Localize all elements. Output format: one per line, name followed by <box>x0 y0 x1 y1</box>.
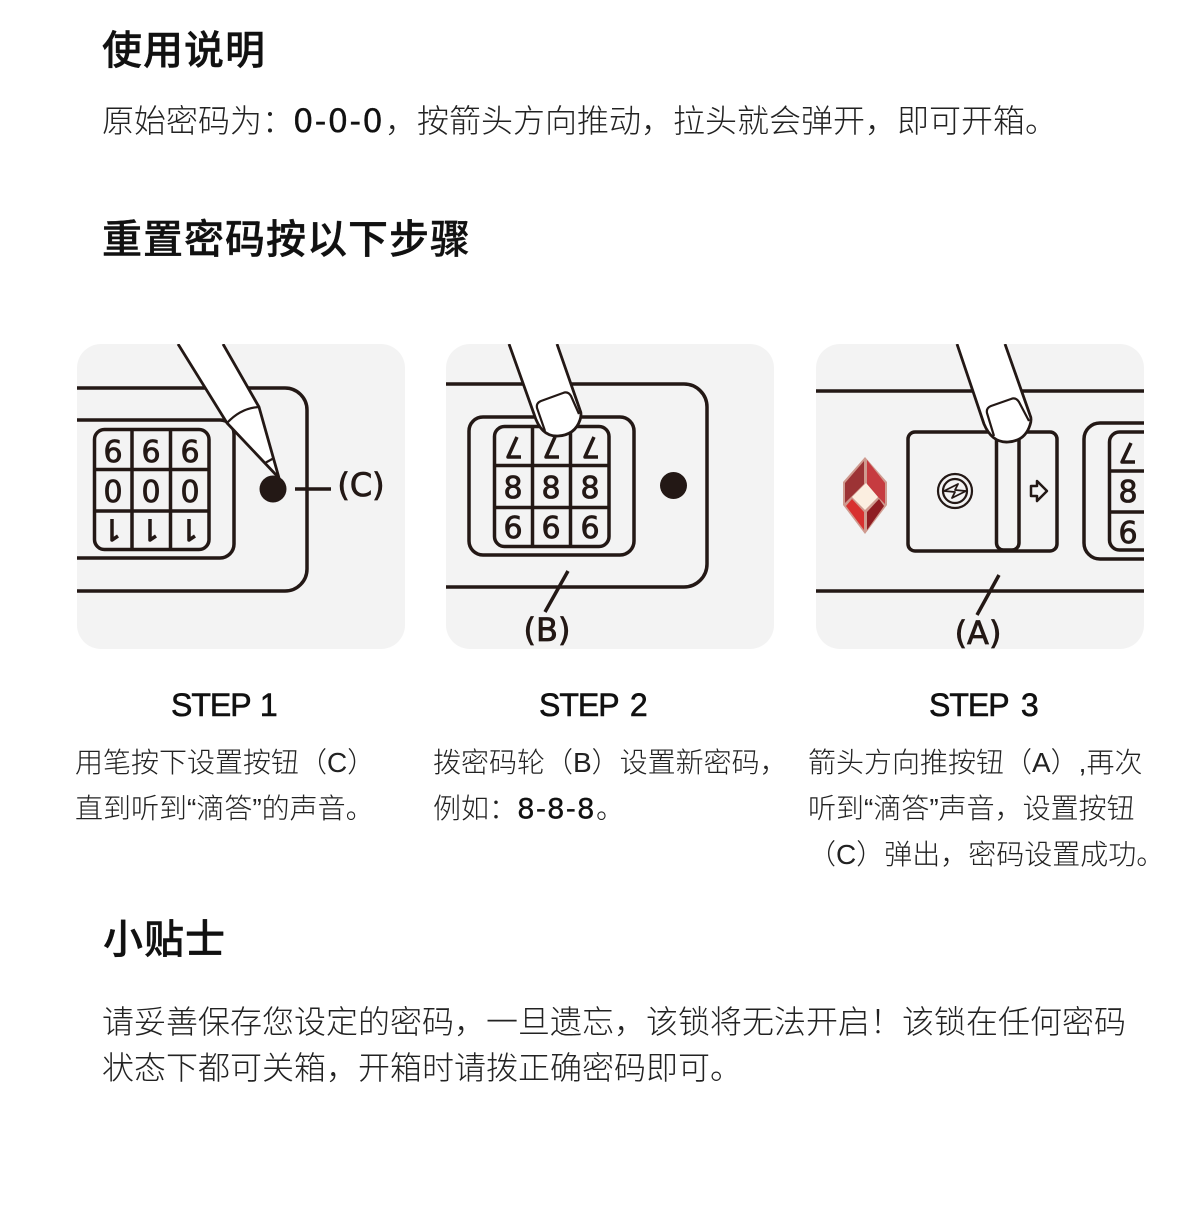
step 2 text: 8-8-8 <box>517 792 596 825</box>
dial grid <box>1108 430 1144 552</box>
dial grid 7 8 6: 8 <box>541 471 561 506</box>
dial grid: 6 <box>1118 516 1138 551</box>
step 3 heading: STEP 3 <box>929 687 1038 723</box>
text block: original password: ，按箭头方向推动，拉头就会弹开，即可开箱。 <box>385 103 1057 139</box>
lock plate <box>70 388 307 591</box>
lock plate <box>440 384 707 587</box>
step 3 text: 听到“滴答”声音，设置按钮 <box>808 793 1135 824</box>
dial grid 6 0 1: 0 <box>141 475 161 510</box>
step 2 text <box>433 747 788 825</box>
lock body lines <box>816 391 1144 591</box>
dial grid 6 0 1: 6 <box>141 435 161 470</box>
dial grid: 8 <box>1118 475 1138 510</box>
step 2 text: 例如： <box>433 793 517 824</box>
dial grid 6 0 1: 0 <box>180 475 200 510</box>
text block: tips: 请妥善保存您设定的密码，一旦遗忘，该锁将无法开启！该锁在任何密码 <box>102 1004 1126 1040</box>
step 3 text: 箭头方向推按钮（A）,再次 <box>808 747 1142 778</box>
text block: original password: 0-0-0 <box>293 102 384 140</box>
leader line C <box>295 487 331 491</box>
step 3 text: （C）弹出，密码设置成功。 <box>808 839 1164 870</box>
leader line B <box>545 571 568 612</box>
step 2 heading: STEP 2 <box>539 687 647 723</box>
label A: (A) <box>955 614 1001 652</box>
panel: step 1 illustration <box>70 344 405 649</box>
icon: pen pressing button <box>178 344 279 478</box>
dial housing <box>469 417 634 555</box>
button C <box>260 476 286 502</box>
step 1 text: 直到听到“滴答”的声音。 <box>75 793 374 824</box>
heading: instructions: 使用说明 <box>102 29 266 73</box>
step 1 text: 用笔按下设置按钮（C） <box>75 747 375 778</box>
leader line A <box>977 575 999 615</box>
dial grid 7 8 6: 6 <box>541 511 561 546</box>
illustrations <box>77 344 1144 649</box>
dial grid 7 8 6: 8 <box>580 471 600 506</box>
step 3 text <box>808 747 1164 870</box>
dial grid 6 0 1: 6 <box>103 435 123 470</box>
dial grid 7 8 6: 8 <box>503 471 523 506</box>
dial grid 6 0 1: 6 <box>180 435 200 470</box>
icon: finger <box>957 344 1031 442</box>
icon: finger <box>509 344 581 436</box>
text block: original password: 原始密码为： <box>102 103 294 139</box>
icon: lightning circle <box>938 474 972 508</box>
dial grid 7 8 6: 6 <box>503 511 523 546</box>
dial grid 6 0 1 <box>94 429 209 550</box>
button C <box>660 472 687 499</box>
icon: red gem logo <box>843 457 887 534</box>
panel: step 2 illustration <box>440 344 774 649</box>
dial grid 6 0 1: 0 <box>103 475 123 510</box>
step 1 text <box>75 747 375 824</box>
step 1 heading: STEP 1 <box>171 687 277 723</box>
label C: (C) <box>337 466 385 504</box>
heading: tips: 小贴士 <box>103 918 226 962</box>
dial housing <box>1082 421 1144 561</box>
step 2 text: 。 <box>596 793 624 824</box>
slider button A <box>996 425 1019 550</box>
panel: step 3 illustration <box>816 344 1144 649</box>
text block: original password <box>102 102 1057 140</box>
dial grid 7 8 6: 6 <box>580 511 600 546</box>
slider switch <box>908 432 1057 551</box>
label B: (B) <box>524 611 570 649</box>
icon: arrow right <box>1031 481 1047 501</box>
heading: reset password steps: 重置密码按以下步骤 <box>102 218 471 262</box>
dial grid 7 8 6 <box>494 426 609 546</box>
text block: tips <box>102 1004 1126 1086</box>
dial housing <box>70 420 234 558</box>
text block: tips: 状态下都可关箱，开箱时请拨正确密码即可。 <box>102 1050 742 1086</box>
step 2 text: 拨密码轮（B）设置新密码， <box>433 747 788 778</box>
